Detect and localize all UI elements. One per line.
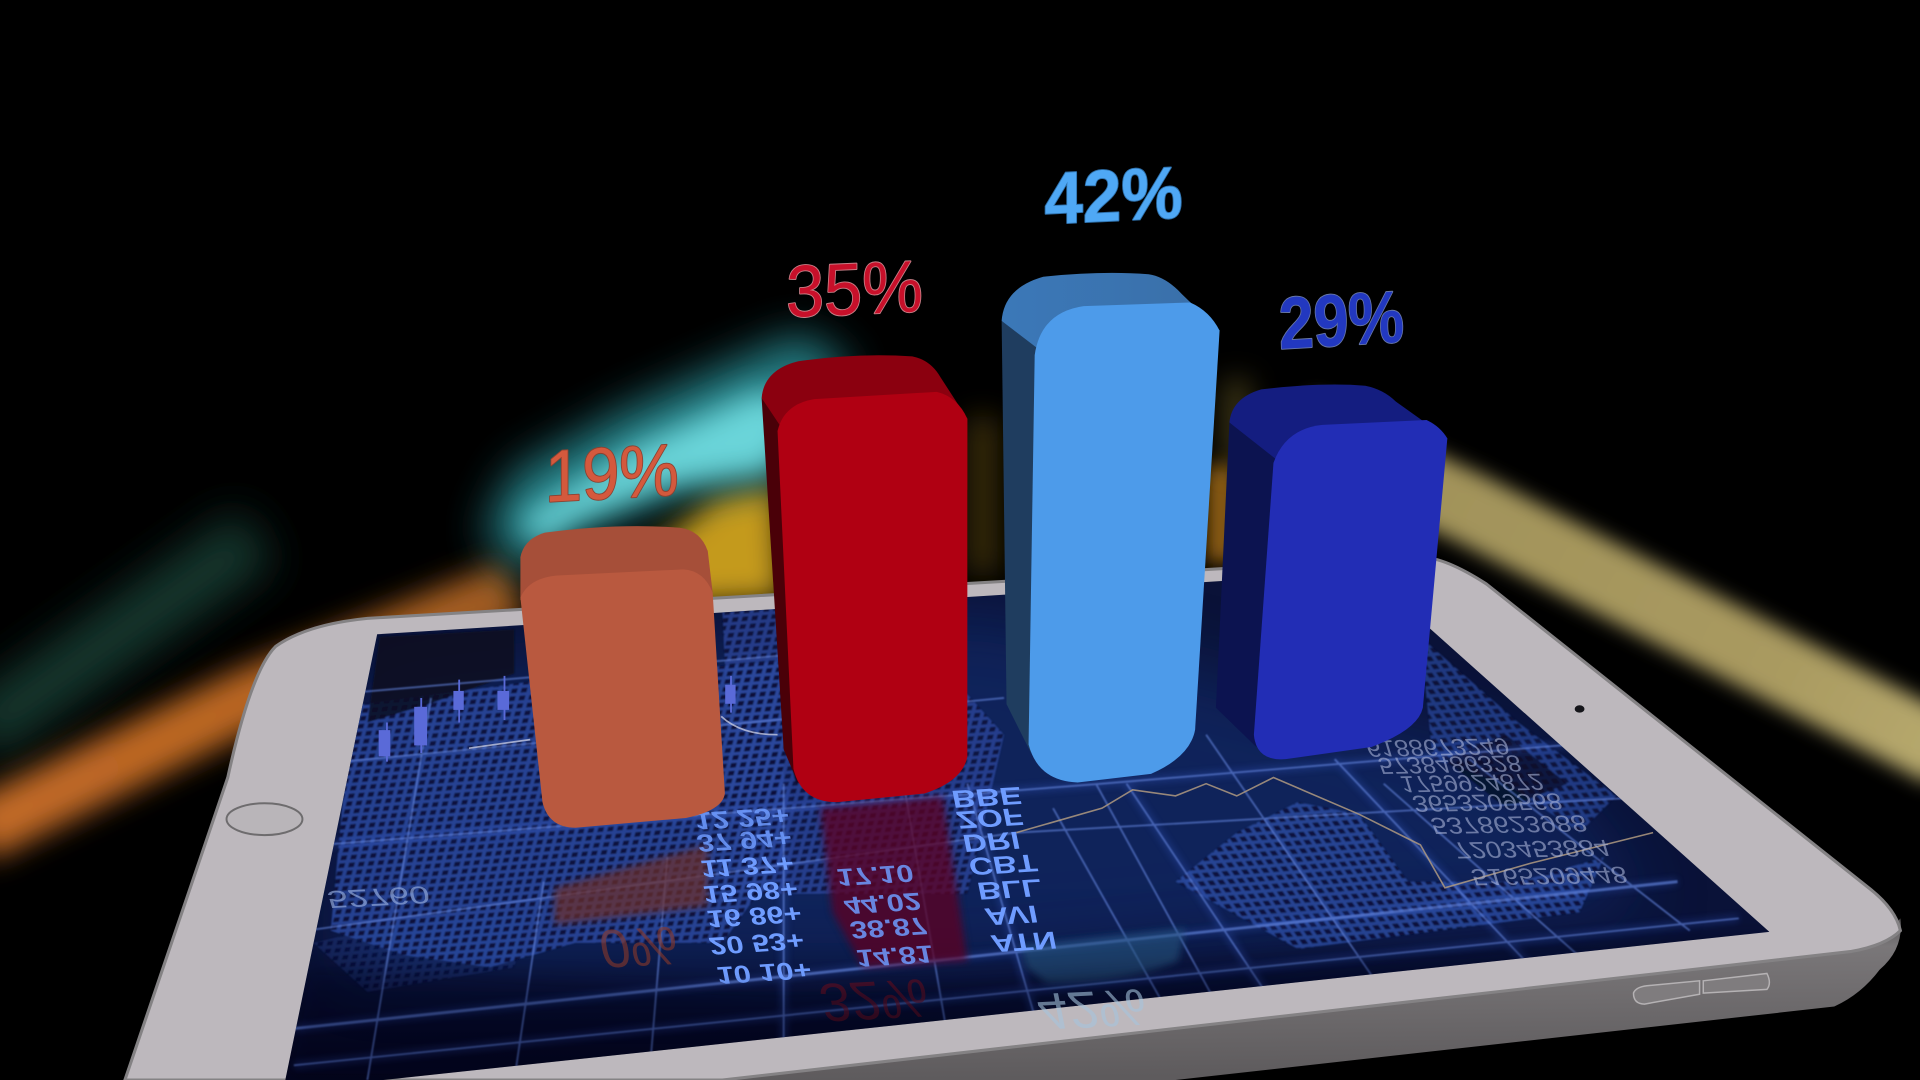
label: 35%: 35% xyxy=(786,246,923,334)
light streaks behind tablet xyxy=(0,333,1920,833)
reflected ticker rows: ATN xyxy=(988,926,1059,957)
reflected bars on screen xyxy=(555,796,1185,983)
reflected ticker rows: BLL xyxy=(975,873,1045,905)
reflected ticker rows: 38.87 xyxy=(848,912,930,944)
reflected numbers right side: 5165209448 xyxy=(1468,861,1631,891)
reflected ticker rows: 11 37+ xyxy=(698,850,796,883)
grid line glow xyxy=(294,741,1739,1080)
reflected ticker rows: 15 98+ xyxy=(701,875,800,908)
bar: 35% red xyxy=(762,355,967,802)
reflected ticker rows: 16 86+ xyxy=(704,900,804,933)
reflected numbers right side: 6188673249 xyxy=(1362,733,1512,761)
bar chart xyxy=(520,273,1447,828)
tablet front bezel xyxy=(125,557,1900,1080)
perspective grid lines xyxy=(294,649,1739,1080)
reflected ticker rows: 37 94+ xyxy=(694,824,794,857)
bar: 19% orange xyxy=(520,526,725,828)
reflected ticker rows: DRI xyxy=(960,826,1023,857)
reflected 42% label on bezel: 42% xyxy=(1032,978,1152,1040)
blue haze xyxy=(343,612,1653,967)
reflected numbers right side: 7203453884 xyxy=(1451,835,1614,864)
side buttons xyxy=(1633,973,1769,1004)
bar: 42% light blue xyxy=(1002,273,1220,782)
reflected ticker rows: ZOF xyxy=(954,802,1026,834)
candlesticks xyxy=(380,676,735,762)
dot matrix map areas xyxy=(313,600,1616,992)
label: 19%: 19% xyxy=(545,428,679,518)
reflected percent labels xyxy=(601,926,926,1022)
value labels xyxy=(545,152,1405,518)
tablet screen: financial dashboard xyxy=(269,551,1788,1080)
bar: 29% navy xyxy=(1216,384,1447,759)
home button xyxy=(227,803,302,835)
camera xyxy=(1575,705,1584,713)
chart line xyxy=(1016,778,1653,888)
reflected ticker rows: BBE xyxy=(949,781,1024,813)
reflected numbers right side: 1759924872 xyxy=(1397,768,1547,797)
reflected ticker rows: 10 10+ xyxy=(714,956,814,989)
reflected ticker rows: CBT xyxy=(966,848,1040,880)
lower screen darkening xyxy=(285,932,1769,1080)
label: 42%: 42% xyxy=(1044,152,1183,241)
reflected percent labels: 32% xyxy=(814,967,934,1033)
reflected ticker rows: 44.02 xyxy=(841,887,923,919)
short chart traces xyxy=(469,716,778,748)
label: 29%: 29% xyxy=(1278,276,1405,365)
reflected percent labels: 0% xyxy=(594,915,684,979)
tablet side edge xyxy=(722,918,1901,1080)
reflected ticker rows: 20 53+ xyxy=(707,927,807,960)
reflected ticker rows: 14.81 xyxy=(854,940,936,972)
reflected numbers right side: 5738486328 xyxy=(1375,750,1525,778)
reflected ticker rows: AVI xyxy=(982,900,1040,930)
reflected numbers right side xyxy=(1362,733,1631,891)
reflected numbers right side: 5378623988 xyxy=(1427,810,1591,839)
reflected numbers right side: 3653209568 xyxy=(1409,788,1565,816)
reflected ticker rows: 12 25+ xyxy=(692,802,792,835)
tablet xyxy=(125,557,1901,1080)
left axis label: 52760 xyxy=(325,881,432,913)
reflected ticker rows xyxy=(692,781,1059,989)
reflected ticker rows: 17.10 xyxy=(834,859,916,891)
